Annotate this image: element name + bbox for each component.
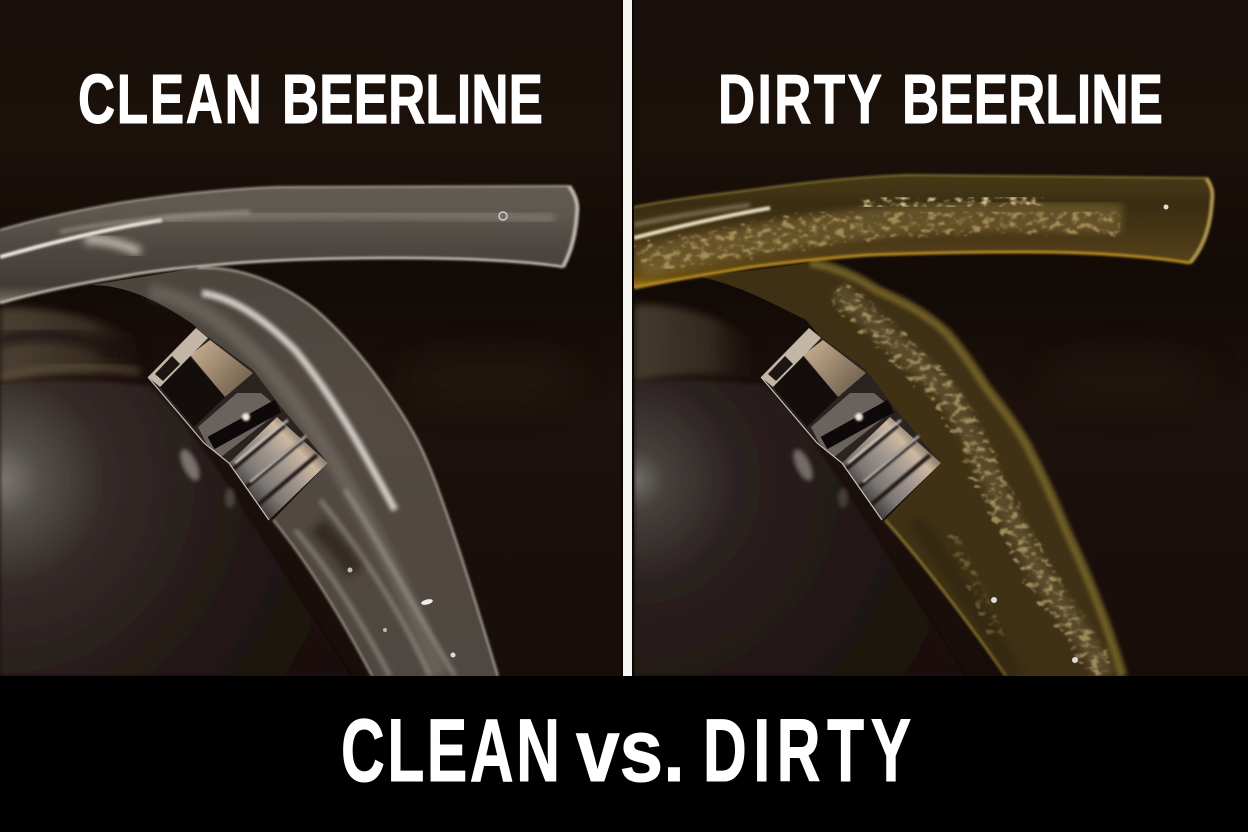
title: clean vs. dirty — [341, 700, 911, 801]
title: clean vs. dirty: CLEAN — [341, 701, 560, 801]
bottom banner — [0, 676, 1248, 832]
upper tube with residue — [634, 175, 1212, 288]
background soft patch — [1040, 358, 1210, 398]
background soft patch — [400, 356, 580, 400]
dark wood background — [634, 0, 1248, 676]
lower curved tube with residue — [700, 263, 1123, 676]
dark wood background — [0, 0, 621, 676]
table surface reflection — [634, 305, 965, 676]
heading: dirty beerline: BEERLINE — [902, 60, 1163, 139]
title: clean vs. dirty: vs. — [576, 700, 685, 800]
divider — [621, 0, 634, 676]
title: clean vs. dirty: DIRTY — [703, 701, 911, 801]
heading: clean beerline: BEERLINE — [282, 60, 543, 139]
panel: clean beerline photo — [0, 0, 621, 676]
fitting: nut and barb — [148, 328, 328, 520]
fitting: nut and barb — [761, 328, 941, 520]
heading: dirty beerline: DIRTY — [718, 60, 882, 139]
heading: dirty beerline — [721, 74, 1162, 124]
upper tube — [0, 186, 577, 303]
panel: dirty beerline photo — [634, 0, 1248, 676]
heading: clean beerline: CLEAN — [78, 60, 262, 139]
lower curved tube — [91, 268, 498, 676]
heading: clean beerline — [80, 74, 542, 124]
table surface reflection — [0, 304, 312, 676]
